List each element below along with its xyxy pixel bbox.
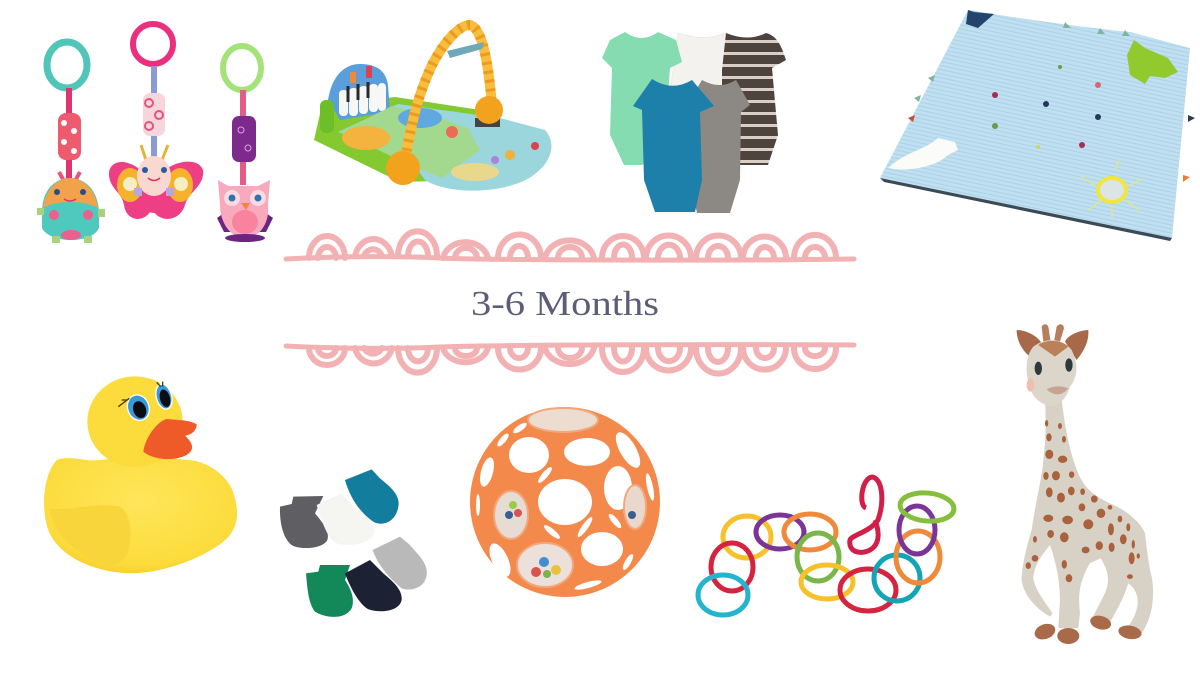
baby socks	[280, 469, 427, 617]
giraffe hooves	[1032, 613, 1143, 644]
bodysuit: striped	[722, 33, 786, 165]
giraffe spots	[1026, 420, 1140, 582]
sock: gray	[373, 537, 427, 590]
sock: charcoal	[280, 496, 328, 548]
giraffe head	[1017, 324, 1088, 407]
bodysuit: gray	[690, 80, 750, 213]
top scalloped divider	[286, 231, 854, 260]
bottom scalloped divider	[286, 345, 854, 374]
toy: butterfly	[109, 24, 203, 219]
bodysuit: white	[670, 33, 740, 92]
piano panel	[320, 64, 390, 133]
bodysuit: mint	[602, 32, 682, 165]
duck wing	[49, 505, 131, 565]
toy: ladybug	[37, 42, 105, 243]
toy: owl	[217, 46, 273, 242]
title: 3-6 Months	[471, 284, 659, 323]
activity blanket	[880, 10, 1195, 241]
duck beak	[143, 419, 197, 459]
sock: navy	[345, 560, 402, 611]
duck eyes	[118, 382, 175, 424]
sock: white	[317, 493, 374, 545]
hanging toys	[37, 24, 273, 243]
icon: plush goose	[888, 138, 958, 169]
rattle capsules	[494, 408, 646, 587]
sock: green	[306, 565, 353, 617]
play gym with piano	[314, 25, 551, 191]
icon: plush frog	[1127, 40, 1178, 84]
orange rattle ball	[470, 407, 660, 597]
red hook link	[850, 477, 882, 552]
sock: teal	[345, 469, 399, 524]
rubber duck	[44, 376, 237, 573]
gym arch	[386, 25, 503, 185]
giraffe body and legs	[1022, 400, 1153, 633]
icon: sun mirror	[1081, 160, 1142, 217]
play mat	[338, 104, 551, 191]
baby bodysuits	[602, 32, 786, 213]
giraffe teether	[1017, 324, 1153, 644]
bodysuit: blue	[633, 79, 714, 212]
linking rings	[698, 477, 955, 615]
